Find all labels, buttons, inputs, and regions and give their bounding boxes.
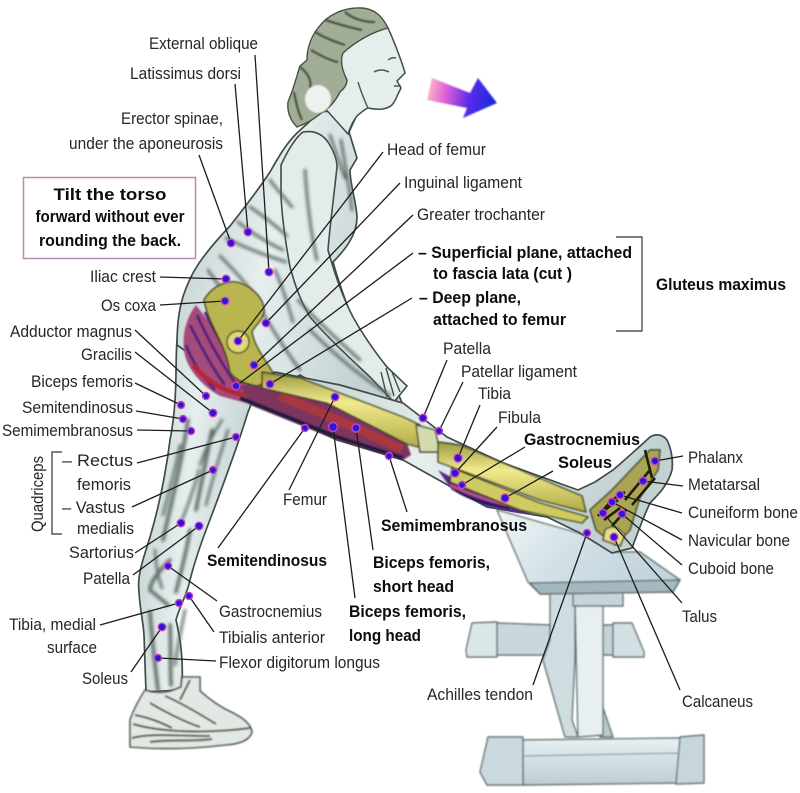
illustration: torso and arm: [177, 108, 407, 405]
hand fingers: [381, 368, 400, 397]
label: cuboid bone: Cuboid bone: [688, 559, 774, 578]
label: flexor digitorum longus: Flexor digitorum longus: [219, 653, 380, 672]
label: gluteus maximus: Gluteus maximus: [656, 275, 786, 294]
illustration: sports shoe: [130, 677, 252, 748]
label: sartorius: Sartorius: [69, 543, 134, 562]
label: talus: Talus: [682, 607, 717, 626]
label: gastrocnemius, bold: Gastrocnemius: [524, 430, 640, 449]
label: latissimus dorsi: Latissimus dorsi: [130, 64, 241, 83]
callout: tilt the torso: [24, 178, 196, 258]
label: semimembranosus: Semimembranosus: [2, 421, 133, 440]
illustration: pelvis and leg bones: [204, 282, 660, 546]
label: biceps femoris short head: Biceps femoris,: [373, 553, 490, 572]
label: soleus, bold: Soleus: [558, 453, 612, 472]
label: patella, leg: Patella: [83, 569, 130, 588]
label: fibula: Fibula: [498, 408, 541, 427]
leader lines: [100, 55, 683, 690]
label: tibia medial surface: surface: [47, 638, 97, 657]
illustration: extended leg: [250, 372, 672, 553]
label: metatarsal: Metatarsal: [688, 475, 760, 494]
label: deep plane: attached to femur: [433, 310, 566, 329]
label: phalanx: Phalanx: [688, 448, 743, 467]
label: tibia: Tibia: [478, 384, 511, 403]
label: superficial plane: [418, 243, 632, 283]
quadriceps group: – Vastus: [62, 498, 125, 517]
label: biceps femoris long head: Biceps femoris,: [349, 602, 466, 621]
label: greater trochanter: Greater trochanter: [417, 205, 545, 224]
label: biceps femoris short head: [373, 553, 490, 596]
label: inguinal ligament: Inguinal ligament: [404, 173, 522, 192]
quadriceps group: femoris: [77, 475, 131, 494]
label: os coxa: Os coxa: [101, 296, 156, 315]
label: deep plane: – Deep plane,: [419, 288, 521, 307]
label: patella, knee: Patella: [443, 339, 491, 358]
label: erector spinae: under the aponeurosis: [69, 134, 223, 153]
label: deep plane: [419, 288, 566, 329]
label: biceps femoris long head: [349, 602, 466, 645]
quadriceps group: [28, 451, 134, 538]
label: biceps femoris short head: short head: [373, 577, 454, 596]
label: semitendinosus, bold: Semitendinosus: [207, 551, 327, 570]
quadriceps group: medialis: [77, 519, 134, 538]
label: tibia medial surface: [9, 615, 97, 657]
callout: tilt the torso: rounding the back.: [39, 231, 181, 250]
label: soleus, leg: Soleus: [82, 669, 128, 688]
label: biceps femoris: Biceps femoris: [31, 372, 133, 391]
callout: tilt the torso: forward without ever: [36, 207, 185, 226]
illustration: hamstring and calf muscles: [184, 305, 548, 513]
bracket: gluteus maximus: [616, 237, 642, 331]
label: patellar ligament: Patellar ligament: [461, 362, 577, 381]
arm detail: [281, 132, 407, 402]
label: calcaneus: Calcaneus: [682, 692, 753, 711]
label: femur: Femur: [283, 490, 327, 509]
label: erector spinae: Erector spinae,: [121, 109, 223, 128]
label: erector spinae: [69, 109, 223, 153]
marker dots: [154, 228, 659, 661]
label: semimembranosus, bold: Semimembranosus: [381, 516, 527, 535]
label: tibialis anterior: Tibialis anterior: [219, 628, 325, 647]
label: tibia medial surface: Tibia, medial: [9, 615, 96, 634]
callout: tilt the torso: Tilt the torso: [54, 185, 166, 204]
label: superficial plane: to fascia lata (cut ): [433, 264, 572, 283]
quadriceps group: Quadriceps: [28, 456, 47, 532]
label: achilles tendon: Achilles tendon: [427, 685, 533, 704]
label: gracilis: Gracilis: [81, 345, 132, 364]
label: external oblique: External oblique: [149, 34, 258, 53]
foot bone detail: [598, 450, 655, 526]
label: iliac crest: Iliac crest: [90, 267, 156, 286]
label: adductor magnus: Adductor magnus: [10, 322, 132, 341]
label: superficial plane: – Superficial plane, attached: [418, 243, 632, 262]
label: gastrocnemius, leg: Gastrocnemius: [219, 602, 322, 621]
illustration: bench: [466, 510, 704, 785]
quadriceps group: – Rectus: [62, 451, 133, 470]
label: semitendinosus: Semitendinosus: [22, 398, 133, 417]
illustration: head and ponytail: [288, 8, 405, 134]
label: navicular bone: Navicular bone: [688, 531, 790, 550]
illustration: standing leg: [139, 340, 255, 692]
label: head of femur: Head of femur: [387, 140, 486, 159]
label: biceps femoris long head: long head: [349, 626, 421, 645]
direction arrow: [427, 78, 497, 118]
